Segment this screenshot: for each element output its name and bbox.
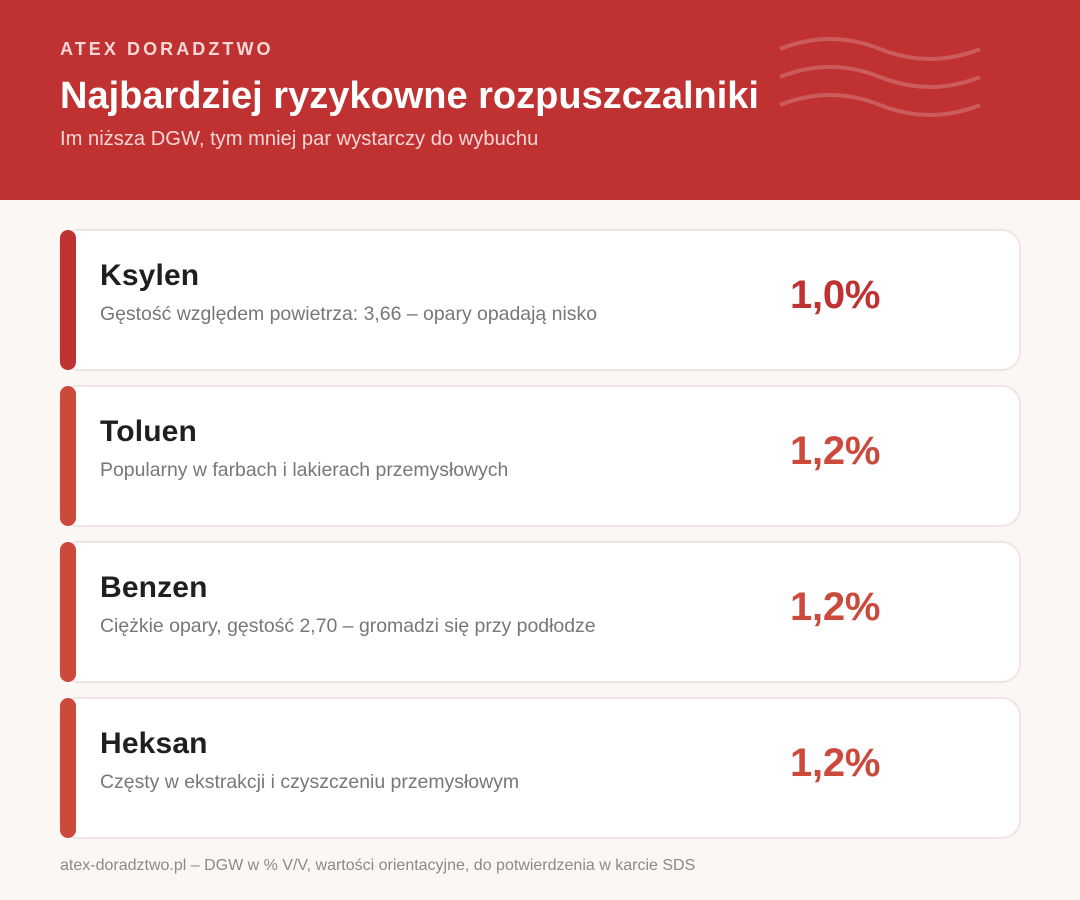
severity bar: Toluen <box>60 386 76 526</box>
description: Ksylen: Gęstość względem powietrza: 3,66 – opary opadają nisko <box>100 303 597 325</box>
value: Ksylen: 1,0% <box>790 273 880 317</box>
name: Toluen: Toluen <box>100 415 197 448</box>
panel: Ksylen <box>60 230 1020 370</box>
header banner <box>0 0 1080 200</box>
description: Toluen: Popularny w farbach i lakierach przemysłowych <box>100 459 508 481</box>
value: Heksan: 1,2% <box>790 741 880 785</box>
description: Benzen: Ciężkie opary, gęstość 2,70 – gromadzi się przy podłodze <box>100 615 596 637</box>
panel: Toluen <box>60 386 1020 526</box>
severity bar: Benzen <box>60 542 76 682</box>
panel: Benzen <box>60 542 1020 682</box>
value: Toluen: 1,2% <box>790 429 880 473</box>
severity bar: Ksylen <box>60 230 76 370</box>
footer note: atex-doradztwo.pl – DGW w % V/V, wartości orientacyjne, do potwierdzenia w karcie SDS <box>60 857 695 874</box>
name: Heksan: Heksan <box>100 727 208 760</box>
eyebrow label: ATEX DORADZTWO <box>60 39 274 59</box>
name: Benzen: Benzen <box>100 571 208 604</box>
name: Ksylen: Ksylen <box>100 259 199 292</box>
icon: vapour waves <box>780 39 980 115</box>
description: Heksan: Częsty w ekstrakcji i czyszczeniu przemysłowym <box>100 771 519 793</box>
title: Najbardziej ryzykowne rozpuszczalniki <box>60 75 759 117</box>
value: Benzen: 1,2% <box>790 585 880 629</box>
severity bar: Heksan <box>60 698 76 838</box>
subtitle: Im niższa DGW, tym mniej par wystarczy do wybuchu <box>60 128 538 150</box>
panel: Heksan <box>60 698 1020 838</box>
